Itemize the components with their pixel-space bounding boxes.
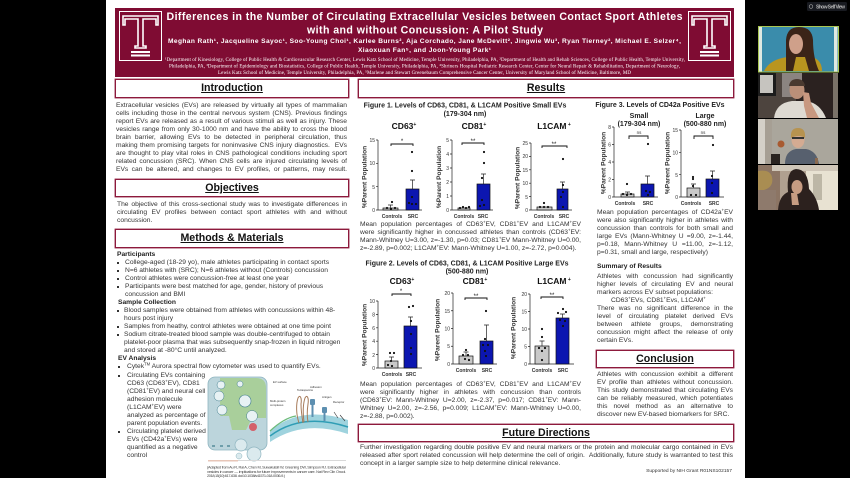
- chart: figure 2 CD81: 0: [447, 362, 450, 368]
- chart: figure 2 CD63: SRC: [406, 372, 417, 378]
- text block: summary of results: [597, 263, 733, 344]
- vesicle membrane with markers: Receptor: [333, 400, 344, 404]
- chart: figure 2 L1CAM: SRC: [558, 368, 569, 374]
- text block: methods and materials: Sodium citrate-treated blood sample was double-centrifuged to obtain: [124, 331, 330, 338]
- text block: figure 2 caption: z=-2.88, p=0.002).: [360, 413, 415, 420]
- text block: introduction: making them promising targets for noninvasive CNS injury diagnostics. EVs: [116, 142, 347, 149]
- chart: figure 2 CD81: 20: [444, 291, 450, 297]
- diagram citation: vesicles in cancer — implications for future improvements in cancer care. Nat Rev Clin Oncol.: [207, 469, 346, 474]
- chart: figure 2 CD81: 5: [447, 344, 450, 350]
- text block: future directions: Further investigation regarding double positive EV and neural markers or the protein and molecular cargo contained in EVs: [360, 444, 733, 451]
- chart: figure 3 large EVs: 0: [675, 195, 678, 201]
- chart: figure 1 L1CAM: 5: [525, 195, 528, 201]
- text block: methods and materials: hours post injury: [124, 315, 173, 322]
- figure 2 title: [365, 260, 569, 276]
- text block: figure 3 caption: concussion than controls for both small and: [597, 225, 733, 232]
- chart: figure 1 L1CAM: L1CAM: [537, 121, 566, 131]
- chart: figure 2 CD63: 10: [369, 299, 375, 305]
- chart: figure 1 CD81: 2: [446, 180, 449, 186]
- text block: conclusion: can be reliably measured, which potentiates: [597, 395, 733, 402]
- text block: introduction: are thought to play vital roles in CNS pathological conditions including sport: [116, 150, 347, 157]
- text block: summary of results: level of circulating platelet derived EVs: [597, 313, 733, 320]
- poster sheet: [106, 0, 745, 478]
- text block: summary of results: Summary of Results: [597, 263, 662, 270]
- chart: figure 3 small EVs: Small: [630, 113, 648, 120]
- text block: future directions: concept in a larger sample size to help determine clinical relevance.: [360, 460, 560, 467]
- chart: figure 2 CD63: CD63: [390, 276, 411, 286]
- vesicle membrane with markers: Multi-protein: [270, 399, 286, 403]
- text block: summary of results: certain EVs.: [597, 337, 633, 344]
- text block: methods and materials: Participants: [117, 251, 155, 258]
- video call button: show self view: [807, 2, 847, 11]
- chart: figure 1 CD81: %Parent Population: [436, 146, 443, 208]
- section heading: Conclusion: Conclusion: [636, 353, 694, 365]
- vesicle membrane with markers: EV surface: [273, 380, 287, 384]
- chart: figure 1 CD63: +: [413, 122, 416, 128]
- text block: methods and materials: CD63 (CD63+EV), CD81: [127, 378, 200, 387]
- text block: conclusion: discover new EV-based biomarkers for SRC.: [597, 411, 729, 418]
- chart: figure 2 CD81: 15: [444, 309, 450, 315]
- diagram: extracellular vesicle biogenesis: [207, 377, 348, 478]
- section heading: Results: Results: [527, 82, 565, 94]
- affiliations: Philadelphia, PA, ³Department of Epidemiology and Biostatistics, College of Public Health, Temple University, Philadelphia, PA, ⁴Shriners Hospital Pediatric Research Center, Center for Neural Repair & Rehabilitation, Department of Neurology,: [169, 64, 680, 70]
- text block: conclusion: EV profile than athletes without concussion.: [597, 379, 733, 386]
- logo: right Temple T: [688, 12, 730, 60]
- text block: methods and materials: [117, 251, 340, 459]
- text block: summary of results: higher levels of circulating EV and neural: [597, 281, 733, 288]
- text block: conclusion: this novel method as an alternative to: [597, 403, 733, 410]
- chart: figure 3 small EVs: 8: [608, 125, 611, 131]
- text block: introduction: brain barrier, allowing EVs to be detected in peripheral circulation, thus: [116, 134, 347, 141]
- chart: figure 3 large EVs: [664, 113, 726, 207]
- logo: left Temple T: [120, 12, 162, 60]
- text block: figure 2 caption: (CD63+EV: Mann-Whitney U=2.00, z=-2.37, p=0.017; CD81+EV: Mann-: [360, 396, 581, 404]
- chart: figure 3 large EVs: ns: [701, 130, 706, 135]
- text block: figure 1 caption: were significantly higher in concussed athletes than controls (CD63+EV:: [360, 228, 581, 236]
- chart: figure 1 L1CAM: +: [566, 122, 571, 128]
- chart: figure 1 CD81: Controls: [454, 214, 474, 220]
- video tile: woman in mustard top, active speaker: [758, 26, 838, 72]
- video tile: woman in dark top with hand to cheek: [758, 165, 838, 210]
- section heading: Future Directions: [358, 424, 734, 442]
- chart: figure 2 CD63: +: [411, 277, 414, 283]
- chart: figure 2 CD63: Controls: [382, 372, 402, 378]
- text block: methods and materials: concussion and BMI: [125, 291, 185, 298]
- chart: figure 2 CD81: [434, 276, 497, 374]
- chart: figure 2 CD81: Controls: [456, 368, 476, 374]
- chart: figure 1 CD81: [436, 121, 493, 220]
- section heading: Introduction: [115, 79, 349, 98]
- text block: conclusion: This study demonstrated that circulating EVs: [597, 387, 733, 394]
- section heading: Introduction: Introduction: [201, 82, 263, 94]
- text block: figure 3 caption: were also significantly higher in athletes with: [597, 217, 733, 224]
- chart: figure 2 CD81: **: [474, 294, 479, 300]
- section heading: Results: [358, 79, 734, 98]
- text block: figure 1 caption: z=-2.89, p=0.002; L1CAM+EV: Mann-Whitney U=1.00, z=-2.72, p=0.004).: [360, 244, 577, 252]
- authors: Meghan Rath¹, Jacqueline Sayoc¹, Soo-Young Choi¹, Karlee Burns², Aja Corchado, Jane McDevitt², Jingwie Wu³, Ryan Tierney², Michael E. Selzer⁴,: [168, 38, 681, 45]
- chart: figure 1 L1CAM: %Parent Population: [514, 147, 522, 209]
- text block: methods and materials: adhesion molecule: [127, 396, 183, 403]
- text block: methods and materials: Samples from heathy, control athletes were obtained at one time point: [124, 323, 331, 330]
- text block: figure 2 caption: Mean population percentages of CD63+EV, CD81+EV and L1CAM+EV: [360, 380, 581, 388]
- chart: figure 3 large EVs: %Parent Population: [664, 132, 672, 194]
- chart: figure 2 L1CAM: 20: [521, 292, 527, 298]
- chart: figure 3 small EVs: SRC: [643, 201, 654, 207]
- chart: figure 2 L1CAM: 0: [524, 362, 527, 368]
- text block: introduction: EVs can be altered, and changes to EV profiles, or patterns, may result.: [116, 166, 347, 173]
- text block: objectives: circulating EV profiles between contact sport athletes with and without: [117, 209, 347, 216]
- text block: methods and materials: Control athletes were concussion-free at least one year: [125, 275, 289, 282]
- chart: figure 1 L1CAM: 25: [522, 141, 528, 147]
- chart: figure 2 L1CAM: 10: [521, 327, 527, 333]
- text block: methods and materials: analyzed as percentage of: [127, 412, 205, 419]
- chart: figure 2 CD81: SRC: [482, 368, 493, 374]
- text block: objectives: The objective of this cross-sectional study was to investigate differences in: [117, 201, 347, 208]
- chart: figure 2 L1CAM: Controls: [532, 368, 552, 374]
- chart: figure 1 CD81: CD81: [462, 121, 483, 131]
- chart: figure 1 CD81: 4: [446, 152, 449, 158]
- vesicle membrane with markers: complexes: [270, 403, 284, 407]
- chart: figure 1 CD63: [362, 121, 422, 220]
- figure 1 title: (179-304 nm): [444, 111, 486, 118]
- chart: figure 2 CD63: 0: [372, 366, 375, 372]
- chart: figure 1 CD81: **: [471, 139, 476, 145]
- text block: objectives: concussion.: [117, 217, 152, 224]
- text block: summary of results: CD63+EVs, CD81+Evs, L1CAM+: [611, 296, 706, 304]
- chart: figure 1 L1CAM: **: [552, 142, 557, 148]
- text block: figure 1 caption: Mean population percentages of CD63+EV, CD81+EV and L1CAM+EV: [360, 220, 581, 228]
- chart: figure 2 L1CAM: 15: [521, 310, 527, 316]
- chart: figure 1 CD63: 15: [369, 138, 375, 144]
- chart: figure 1 CD63: CD63: [392, 121, 413, 131]
- chart: figure 1 CD81: +: [483, 122, 486, 128]
- text block: methods and materials: Circulating EVs containing: [127, 372, 205, 379]
- chart: figure 1 CD81: 3: [446, 166, 449, 172]
- text block: methods and materials: Participants were best matched for age, gender, history of previous: [125, 283, 323, 290]
- text block: methods and materials: College-aged (18-29 yo), male athletes participating in contact sports: [125, 259, 329, 266]
- chart: figure 2 CD63: *: [400, 289, 403, 295]
- text block: figure 2 caption: Whitney U=2.00, z=-2.56, p=0.009; L1CAM+EV: Mann-Whitney U=0.00,: [360, 404, 581, 412]
- text block: conclusion: Athletes with concussion exhibit a different: [597, 371, 733, 378]
- header banner: [115, 8, 734, 77]
- text block: introduction: vesicles range from only 30-1000 nm and have the ability to cross the blood: [116, 126, 347, 133]
- video tile: person with glasses: [758, 119, 838, 164]
- diagram citation: 2018;15(10):617-638. doi:10.1038/s41571-018-0036-9.): [207, 473, 286, 478]
- chart: figure 2 CD63: 4: [372, 339, 375, 345]
- text block: figure 3 caption: Mean population percentages of CD42a+EV: [597, 208, 733, 216]
- chart: figure 3 large EVs: Large: [695, 113, 715, 120]
- text block: figure 2 caption: [360, 380, 581, 420]
- released vesicles: [208, 439, 346, 462]
- text block: introduction: related concussion (SRC). When CNS cells are injured circulating levels of: [116, 158, 347, 165]
- diagram citation: [207, 464, 347, 478]
- text block: figure 3 caption: p=0.31, small and large, respectively): [597, 249, 708, 256]
- text block: methods and materials: Circulating platelet derived: [127, 428, 206, 435]
- text block: figure 3 caption: [597, 208, 733, 256]
- text block: methods and materials: Blood samples were obtained from athletes with concussions within 48-: [124, 307, 335, 314]
- chart: figure 1 CD63: Controls: [382, 214, 402, 220]
- figure 2 title: (500-880 nm): [446, 268, 488, 276]
- affiliations: ¹Department of Kinesiology, College of Public Health & Cardiovascular Research Center, Lewis Katz School of Medicine, Temple University, Philadelphia, PA, ²Department of Health and Rehab Sciences, College of Public Health, Temple University,: [165, 57, 685, 63]
- text block: future directions: [360, 444, 733, 467]
- chart: figure 2 CD81: +: [484, 277, 487, 283]
- chart: figure 2 CD63: [362, 276, 422, 378]
- text block: methods and materials: N=6 athletes with (SRC); N=6 athletes without (Controls) concussion: [125, 267, 328, 274]
- chart: figure 3 small EVs: 2: [608, 178, 611, 184]
- title: [166, 11, 683, 37]
- text block: methods and materials: (L1CAM+EV) were: [127, 402, 182, 411]
- funding note: Supported by NIH Grant R01NS102157: [646, 469, 732, 474]
- chart: figure 1 CD63: 0: [372, 208, 375, 214]
- vesicle membrane with markers: [270, 380, 348, 442]
- chart: figure 2 CD81: 10: [444, 326, 450, 332]
- text block: methods and materials: EVs (CD42a+EVs) were: [127, 434, 197, 443]
- text block: summary of results: markers across EV subset populations:: [597, 289, 713, 296]
- text block: figure 1 caption: Mann-Whitney U=3.00, z=-1.30, p=0.03; CD81+EV Mann-Whitney U=0.00,: [360, 236, 581, 244]
- chart: figure 2 CD63: 6: [372, 326, 375, 332]
- chart: figure 3 small EVs: (179-304 nm): [618, 121, 660, 128]
- title: with and without Concussion: A Pilot Study: [306, 25, 543, 37]
- section heading: Methods and Materials: Methods & Materials: [180, 232, 284, 244]
- text block: methods and materials: parent population events.: [127, 420, 202, 427]
- figure 2 title: Figure 2. Levels of CD63, CD81, & L1CAM Positive Large EVs: [365, 260, 569, 268]
- chart: figure 1 CD81: 1: [446, 194, 449, 200]
- authors: [168, 38, 681, 54]
- chart: figure 3 small EVs: %Parent Population: [600, 132, 608, 194]
- text block: objectives: [117, 201, 347, 224]
- chart: figure 3 small EVs: 0: [608, 195, 611, 201]
- chart: figure 3 large EVs: Controls: [681, 201, 701, 207]
- affiliations: Lewis Katz School of Medicine, Temple University, Philadelphia, PA, ⁵Marlene and Stewart Greenebaum Comprehensive Cancer Center, University of Maryland School of Medicine, Baltimore, MD: [218, 70, 631, 76]
- text block: figure 1 caption: [360, 220, 581, 252]
- chart: figure 1 CD63: 5: [372, 185, 375, 191]
- figure 1 title: [364, 102, 566, 118]
- text block: summary of results: between athlete groups, demonstrating: [597, 321, 733, 328]
- chart: figure 3 small EVs: ns: [637, 130, 642, 135]
- chart: figure 2 CD81: %Parent Population: [434, 299, 442, 361]
- affiliations: [165, 57, 685, 76]
- text block: methods and materials: EV Analysis: [118, 355, 156, 362]
- video call button: show self view: Show Self View: [816, 4, 845, 10]
- chart: figure 2 CD63: 8: [372, 312, 375, 318]
- video tile: man resting chin on hand: [758, 73, 838, 118]
- text block: figure 2 caption: were significantly higher in athletes with concussion than controls: [360, 389, 581, 396]
- chart: figure 3 small EVs: [600, 113, 660, 207]
- text block: future directions: released after sport related concussion will help determine the cell of origin. Additionally, future study is warranted to test this: [360, 452, 733, 459]
- chart: figure 2 L1CAM: %Parent Population: [510, 297, 518, 359]
- vesicle membrane with markers: Adhesion: [310, 385, 322, 389]
- chart: figure 1 L1CAM: 0: [525, 208, 528, 214]
- chart: figure 2 L1CAM: **: [550, 293, 555, 299]
- chart: figure 2 CD81: CD81: [463, 276, 484, 286]
- chart: figure 1 L1CAM: 15: [522, 168, 528, 174]
- text block: introduction: report EVs are released as a result of various stimuli as well as injury. These: [116, 118, 347, 125]
- vesicle membrane with markers: Antigen: [322, 395, 332, 399]
- chart: figure 3 small EVs: 4: [608, 160, 611, 166]
- text block: methods and materials: quantified as a negative: [127, 444, 198, 451]
- chart: figure 1 L1CAM: 10: [522, 181, 528, 187]
- section heading: Objectives: Objectives: [205, 182, 259, 194]
- text block: methods and materials: CytekTM Aurora spectral flow cytometer was used to quantify EVs.: [127, 362, 321, 370]
- figure 1 title: Figure 1. Levels of CD63, CD81, & L1CAM Positive Small EVs: [364, 102, 566, 110]
- figure 3 title: Figure 3. Levels of CD42a Positive EVs: [595, 102, 725, 109]
- chart: figure 3 small EVs: Controls: [615, 201, 635, 207]
- chart: figure 2 L1CAM: [510, 276, 574, 374]
- chart: figure 1 CD81: SRC: [478, 214, 489, 220]
- chart: figure 3 large EVs: (500-880 nm): [684, 121, 726, 128]
- text block: methods and materials: platelet-poor plasma that was subsequently snap-frozen in liquid nitrogen: [124, 339, 340, 346]
- text block: methods and materials: (CD81+EV) and neural cell: [127, 386, 205, 395]
- chart: figure 1 L1CAM: Controls: [534, 214, 554, 220]
- text block: methods and materials: control: [127, 452, 147, 459]
- chart: figure 3 large EVs: SRC: [709, 201, 720, 207]
- chart: figure 1 L1CAM: 20: [522, 154, 528, 160]
- text block: summary of results: Athletes with concussion had significantly: [597, 273, 733, 280]
- section heading: Future Directions: Future Directions: [502, 427, 590, 439]
- chart: figure 3 large EVs: 5: [675, 173, 678, 179]
- chart: figure 2 CD63: 2: [372, 353, 375, 359]
- title: Differences in the Number of Circulating Extracellular Vesicles between Contact Sport Athletes: [166, 11, 683, 23]
- chart: figure 2 L1CAM: L1CAM: [537, 276, 566, 286]
- text block: summary of results: concussion might affect the release of only: [597, 329, 733, 336]
- chart: figure 2 CD63: %Parent Population: [362, 304, 368, 366]
- text block: introduction: Extracellular vesicles (EVs) are released by virtually all types of mammalian: [116, 102, 347, 109]
- chart: figure 3 large EVs: 10: [672, 150, 678, 156]
- text block: figure 3 caption: p=0.18, Mann-Whitney U =11.00, z=-1.12,: [597, 241, 733, 248]
- chart: figure 1 CD63: %Parent Population: [362, 146, 368, 208]
- vesicle membrane with markers: Tetraspanins: [297, 388, 313, 392]
- text block: figure 3 caption: large EVs (Mann-Whitney U =9.00, z=-1.44,: [597, 233, 733, 240]
- text block: introduction: [116, 102, 347, 173]
- text block: methods and materials: and stored at -80°C until analyzed.: [124, 347, 227, 354]
- section heading: Objectives: [115, 179, 349, 197]
- chart: figure 1 L1CAM: [514, 121, 572, 220]
- chart: figure 3 large EVs: 15: [672, 128, 678, 134]
- section heading: Methods and Materials: [115, 229, 349, 248]
- chart: figure 1 CD81: 0: [446, 208, 449, 214]
- cell body: [208, 377, 267, 450]
- chart: figure 2 L1CAM: 5: [524, 344, 527, 350]
- chart: figure 1 CD63: 10: [369, 161, 375, 167]
- chart: figure 1 CD63: SRC: [408, 214, 419, 220]
- chart: figure 1 L1CAM: SRC: [559, 214, 570, 220]
- text block: methods and materials: Sample Collection: [118, 299, 176, 306]
- chart: figure 1 CD81: 5: [446, 138, 449, 144]
- text block: summary of results: There was no significant difference in the: [597, 305, 733, 312]
- text block: conclusion: [597, 371, 733, 418]
- authors: Xiaoxuan Fan⁵, and Joon-Young Park¹: [358, 47, 491, 54]
- chart: figure 1 CD63: *: [401, 139, 404, 145]
- chart: figure 2 L1CAM: +: [566, 277, 571, 283]
- section heading: Conclusion: [596, 350, 734, 368]
- chart: figure 3 small EVs: 6: [608, 142, 611, 148]
- text block: introduction: cells including those in the central nervous system (CNS). Previous findings: [116, 110, 347, 117]
- diagram citation: (Adapted from Au R, Rai A, Chen M, Suwakulsiri W, Greening DW, Simpson RJ. Extracellular: [207, 464, 347, 470]
